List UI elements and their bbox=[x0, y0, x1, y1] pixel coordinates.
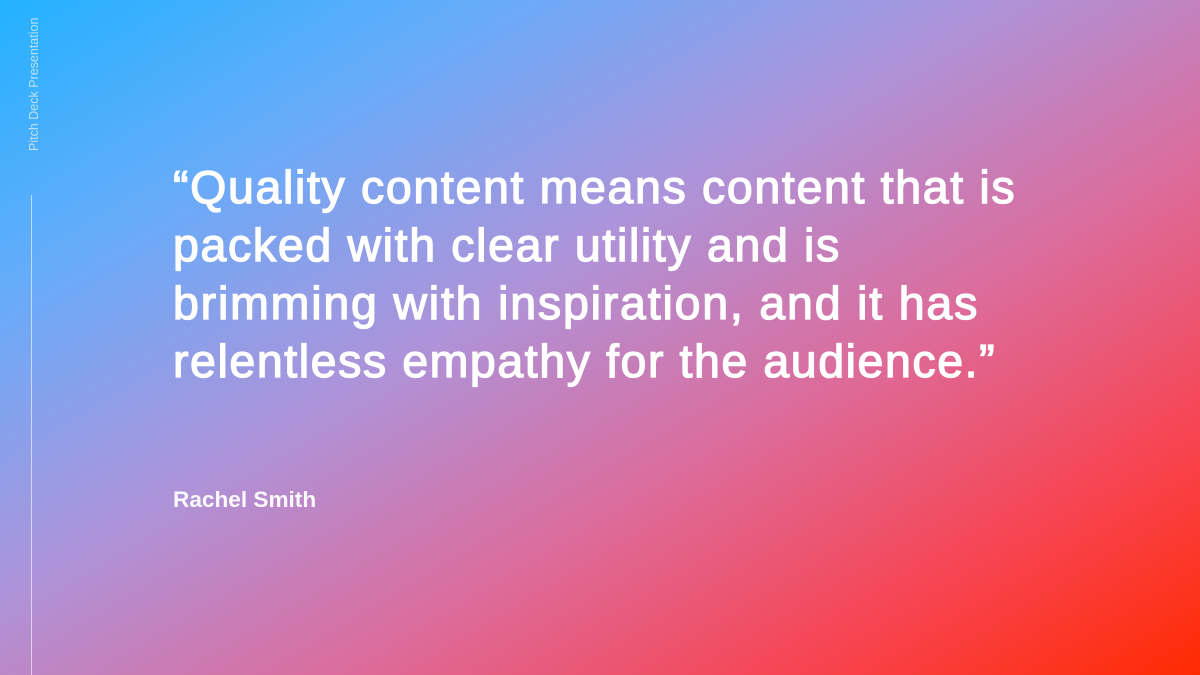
quote text bbox=[173, 161, 1016, 388]
side label: Pitch Deck Presentation bbox=[27, 18, 41, 151]
quote text: packed with clear utility and is bbox=[173, 219, 841, 271]
quote text: brimming with inspiration, and it has bbox=[173, 277, 979, 329]
quote text: “Quality content means content that is bbox=[173, 161, 1016, 213]
vertical rule bbox=[31, 195, 32, 675]
quote text: relentless empathy for the audience.” bbox=[173, 335, 996, 387]
attribution: Rachel Smith bbox=[173, 487, 316, 512]
